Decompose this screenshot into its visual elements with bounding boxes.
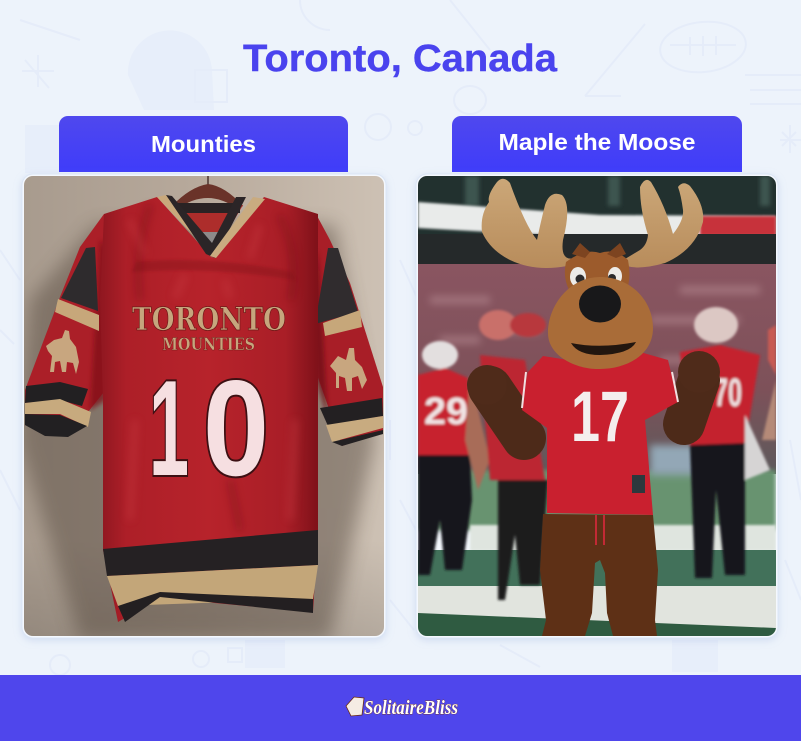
right arm <box>678 351 720 424</box>
heading tab: Maple the Moose <box>452 116 742 172</box>
footer bar <box>0 675 801 741</box>
icon: horse and rider left sleeve <box>46 330 79 374</box>
player behind left <box>479 310 548 600</box>
jersey number 10: 1 <box>149 352 189 504</box>
player 70 <box>680 307 776 578</box>
panel: Maple the Moose <box>416 116 778 638</box>
head <box>564 252 630 289</box>
icon: playing cards <box>346 697 364 716</box>
player 29: 29 <box>424 391 468 433</box>
jersey tag <box>632 475 645 493</box>
icon: horse and rider right sleeve <box>330 348 367 391</box>
hanger <box>176 176 243 206</box>
jersey <box>522 352 678 515</box>
jersey body <box>100 195 318 622</box>
jersey number 10: 0 <box>203 352 269 504</box>
left arm <box>467 365 524 438</box>
antlers <box>482 179 703 268</box>
blurred players <box>418 307 776 600</box>
heading tab: Mounties <box>59 116 348 172</box>
title: Toronto, Canada <box>243 38 558 80</box>
mascot: Maple the Moose <box>467 179 720 636</box>
heading tab: Maple the Moose: Maple the Moose <box>498 129 696 155</box>
player 29 <box>418 341 490 575</box>
muzzle <box>548 277 653 369</box>
panel: Mounties <box>18 116 386 640</box>
right sleeve <box>318 218 383 446</box>
stadium background <box>418 176 776 636</box>
nose <box>579 286 621 322</box>
heading tab: Mounties: Mounties <box>151 131 256 157</box>
left sleeve <box>25 214 104 437</box>
logo: Solitaire Bliss: SolitaireBliss <box>364 697 458 719</box>
jersey lettering: TORONTO: TORONTO <box>132 300 286 338</box>
jersey lettering: MOUNTIES: MOUNTIES <box>162 335 255 355</box>
jersey number 17: 17 <box>571 378 629 457</box>
hem stripes <box>103 530 318 576</box>
card frame <box>22 174 386 638</box>
mouth <box>571 342 636 355</box>
legs <box>540 514 658 636</box>
photo: red Toronto Mounties jersey on a hanger <box>18 176 384 640</box>
card frame <box>416 174 778 638</box>
collar <box>186 205 243 258</box>
jersey number 10 <box>152 378 266 478</box>
photo: moose mascot on a football field <box>418 176 776 636</box>
player 70: 70 <box>714 371 742 415</box>
